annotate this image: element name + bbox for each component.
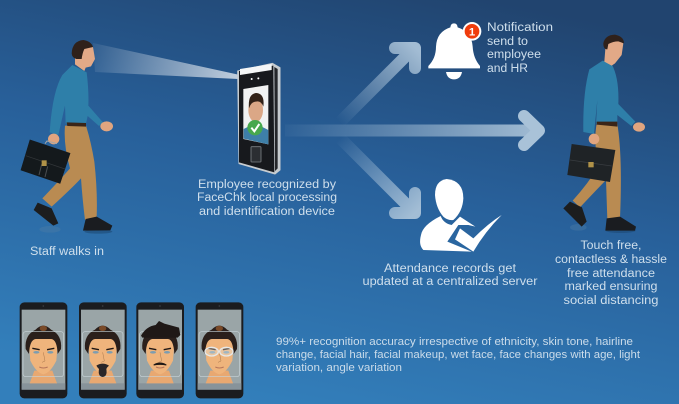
icon: attendance person with check bbox=[420, 179, 502, 252]
text: notification: and HR bbox=[487, 63, 528, 75]
text: touch free bbox=[555, 240, 667, 307]
phone: glasses bbox=[196, 302, 243, 398]
text: recognition accuracy bbox=[276, 336, 640, 374]
phones: face variations bbox=[20, 302, 243, 398]
phone: goatee bbox=[79, 302, 127, 398]
text: recognition accuracy: change, facial hair, facial makeup, wet face, face changes with age, light bbox=[276, 349, 640, 361]
figure: employee walking out bbox=[563, 35, 645, 233]
arrow: to staff exit bbox=[285, 116, 539, 145]
text: notification: employee bbox=[487, 49, 541, 61]
text: touch free: contactless & hassle bbox=[555, 254, 667, 266]
text: notification: Notification bbox=[487, 22, 553, 34]
device: FaceChk terminal bbox=[238, 63, 280, 174]
arrow: to notification bbox=[340, 48, 415, 122]
text: employee recognized: FaceChk local processing bbox=[197, 192, 337, 204]
text: touch free: social distancing bbox=[564, 295, 658, 307]
text: touch free: free attendance bbox=[567, 268, 655, 280]
text: touch free: Touch free, bbox=[580, 240, 642, 252]
text: recognition accuracy: 99%+ recognition accuracy irrespective of ethnicity, skin tone, hairline bbox=[276, 336, 633, 348]
text: attendance records: updated at a centralized server bbox=[362, 276, 538, 288]
text: notification: send to bbox=[487, 36, 528, 48]
icon: notification bell: 1 bbox=[469, 26, 475, 38]
icon: notification bell bbox=[428, 22, 481, 79]
text: recognition accuracy: variation, angle variation bbox=[276, 362, 402, 374]
phone: styled hair and moustache bbox=[136, 302, 184, 398]
text: employee recognized: and identification device bbox=[199, 206, 335, 218]
text: staff walks in: Staff walks in bbox=[30, 246, 104, 258]
phone: clean face bbox=[20, 302, 67, 398]
text: employee recognized: Employee recognized by bbox=[198, 179, 336, 191]
figure: staff walking in bbox=[21, 40, 113, 234]
text: attendance records bbox=[362, 263, 538, 288]
text: employee recognized bbox=[197, 179, 337, 218]
text: attendance records: Attendance records get bbox=[384, 263, 517, 275]
text: touch free: marked ensuring bbox=[564, 281, 658, 293]
light beam from face to device bbox=[93, 43, 240, 79]
arrow: to attendance records bbox=[340, 138, 415, 213]
text: notification bbox=[487, 22, 553, 75]
